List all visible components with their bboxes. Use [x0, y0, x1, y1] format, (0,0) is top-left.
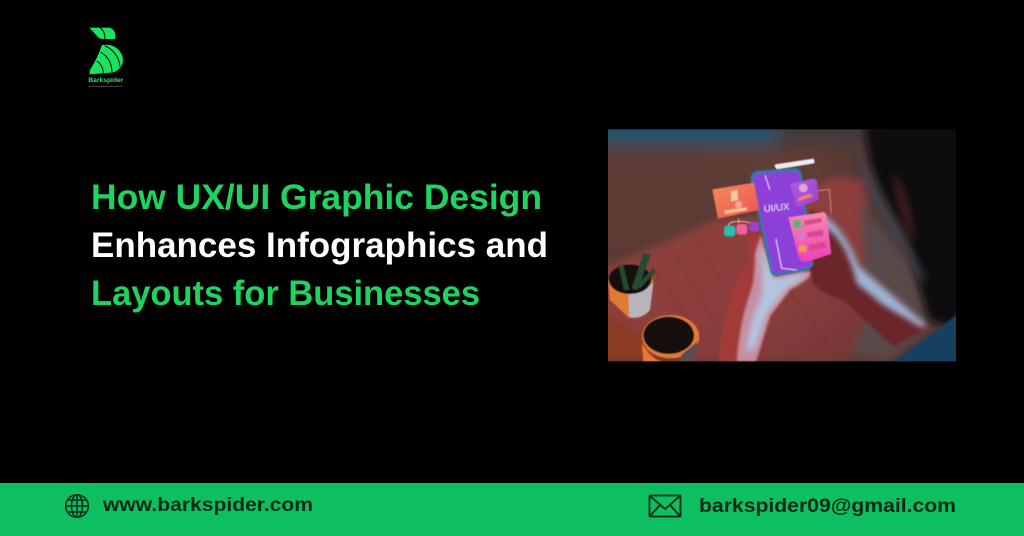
table [600, 177, 930, 361]
logo tagline [88, 86, 123, 87]
website address: www.barkspider.com [102, 494, 313, 516]
logo wordmark: Barkspider [88, 77, 124, 84]
logo: Barkspider [88, 28, 124, 87]
title [91, 178, 548, 313]
phone screen [753, 171, 811, 273]
title line 3: Layouts for Businesses [91, 274, 480, 313]
phone [750, 168, 813, 276]
card: list [788, 212, 831, 262]
plant pot [608, 253, 655, 318]
card: profile [790, 178, 831, 213]
right arm and hand [807, 210, 925, 347]
search bar [775, 159, 815, 169]
icon: globe [66, 495, 88, 517]
person silhouette [860, 130, 956, 362]
app icons [724, 222, 759, 236]
wall [608, 129, 894, 240]
photo: hands holding phone with UI/UX interface [608, 129, 956, 362]
footer bar [0, 483, 1024, 536]
icon: logo mark [89, 28, 123, 74]
icon: envelope [650, 496, 680, 516]
left hand [718, 233, 813, 361]
second pot [642, 315, 699, 361]
phone label: UI/UX [763, 202, 790, 215]
title line 1: How UX/UI Graphic Design [91, 178, 542, 217]
email address: barkspider09@gmail.com [699, 495, 956, 517]
title line 2: Enhances Infographics and [91, 226, 548, 265]
card: music [712, 183, 759, 227]
